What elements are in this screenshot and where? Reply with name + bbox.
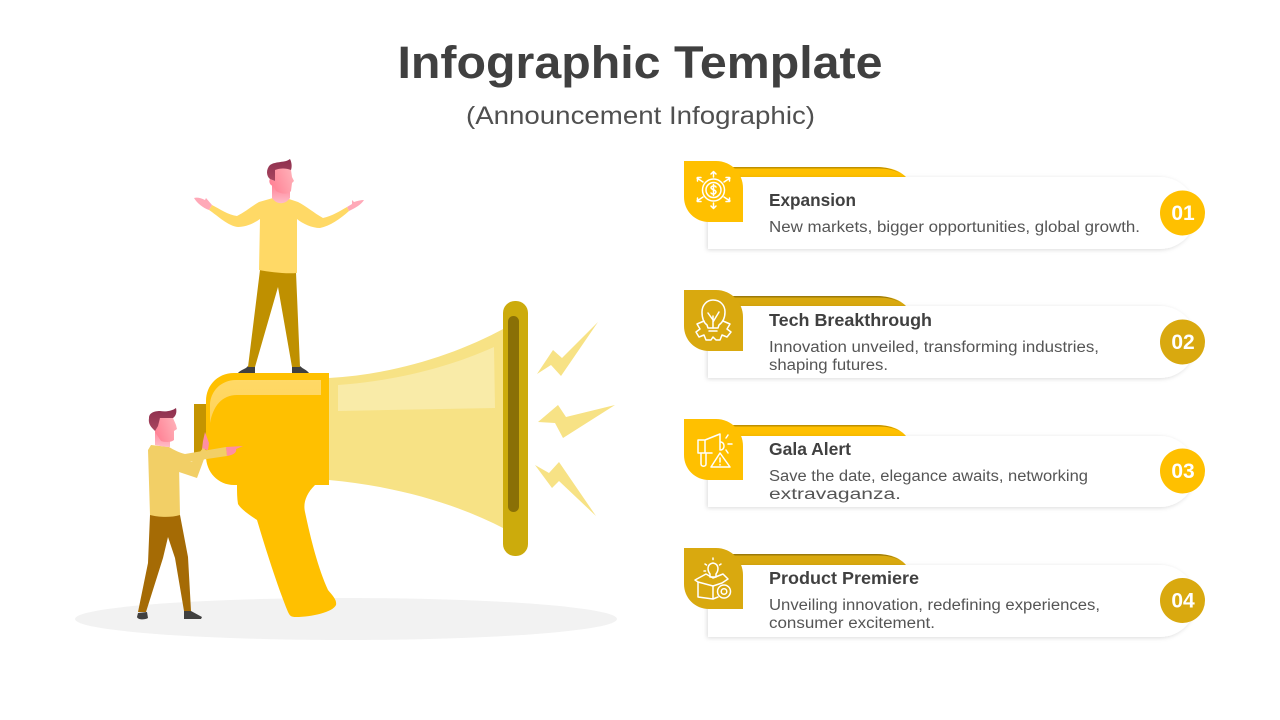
number: 01 [1171,202,1195,225]
shoes [137,611,202,619]
back tab [730,296,906,306]
description: Save the date, elegance awaits, networking [769,468,1088,485]
trousers [138,515,191,612]
megaphone horn [329,328,505,529]
description: New markets, bigger opportunities, global growth. [769,219,1140,236]
icon: bulb with gear [696,300,731,340]
trousers [248,270,300,367]
heading: Product Premiere [769,568,919,588]
description line 2: shaping futures. [769,357,888,374]
shoes [238,366,309,373]
white card [708,177,1196,249]
white card [708,436,1196,507]
bolt top [537,322,598,376]
hair [267,159,292,181]
rim inner slot [508,316,519,512]
back tab [730,554,906,565]
card 3: Gala Alert [684,419,1205,507]
neck [272,184,290,203]
sound bolts [535,322,615,516]
megaphone rim [503,301,528,556]
neck [155,428,170,447]
person standing on megaphone [194,159,364,373]
icon: dollar with arrows [697,172,730,208]
card 1: Expansion [684,161,1205,249]
white card [708,565,1196,637]
number badge [1160,320,1205,364]
description line 2: extravaganza. [769,486,901,503]
number: 03 [1171,460,1195,483]
heading: Gala Alert [769,439,851,459]
rear tab [194,404,208,454]
description: Innovation unveiled, transforming industries, [769,339,1099,356]
icon tile [684,419,743,480]
icon tile [684,548,743,609]
white card [708,306,1196,378]
back tab [730,425,906,436]
number: 02 [1171,331,1195,354]
icon: box with bulb and gear [695,558,730,599]
back arm [179,448,207,478]
icon tile [684,290,743,351]
number badge [1160,578,1205,623]
face [155,418,177,442]
horn highlight [338,347,495,411]
description line 2: consumer excitement. [769,615,935,632]
card 4: Product Premiere [684,548,1205,637]
megaphone illustration [194,301,528,617]
description: Unveiling innovation, redefining experiences, [769,597,1100,614]
back tab [730,167,906,177]
megaphone body and handle [206,373,336,617]
pointing hand [226,446,243,456]
body highlight [210,380,321,423]
number: 04 [1171,590,1195,612]
person pointing at megaphone [137,408,243,619]
heading: Expansion [769,190,856,210]
heading: Tech Breakthrough [769,310,932,330]
title: Infographic Template [398,37,882,88]
icon tile [684,161,743,222]
bolt bottom [535,462,596,516]
number badge [1160,190,1205,236]
shirt and pointing arm [148,445,227,517]
hands [194,198,364,211]
raised hand [202,432,209,450]
card 2: Tech Breakthrough [684,290,1205,378]
icon: megaphone with warning [698,434,732,467]
ground shadow [75,598,617,640]
hair [149,408,176,431]
arms and shirt [209,198,349,273]
bolt middle [538,405,615,438]
face [269,168,294,194]
subtitle: (Announcement Infographic) [466,102,815,130]
number badge [1160,448,1205,494]
